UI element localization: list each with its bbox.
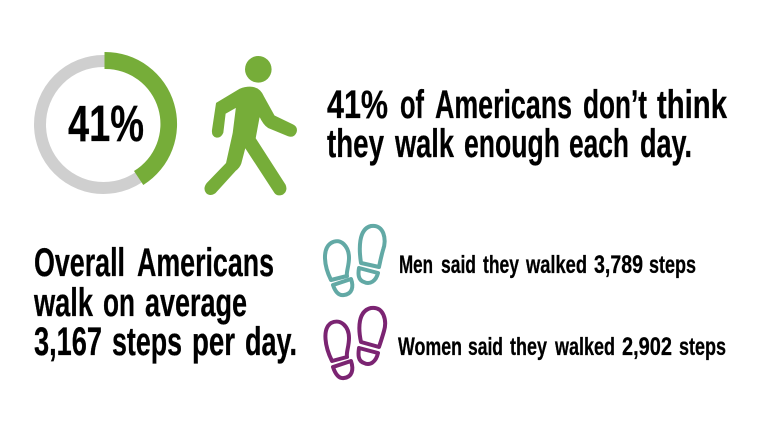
text: women steps: Women (398, 333, 462, 361)
heading: 41% of Americans (327, 83, 728, 166)
heading: 41% of Americans: they (327, 122, 385, 166)
text block: overall average steps: Overall (34, 241, 125, 285)
text block: overall average steps: walk (33, 281, 94, 325)
icon: purple footprints (325, 308, 385, 378)
heading: 41% of Americans: of (400, 83, 424, 127)
heading: 41% of Americans: day. (640, 122, 692, 166)
text block: overall average steps (33, 241, 297, 364)
text: women steps (398, 333, 726, 361)
heading: 41% of Americans: each (569, 122, 629, 166)
text: men steps: walked (525, 251, 587, 279)
text: men steps: they (483, 251, 519, 279)
heading: 41% of Americans: think (657, 83, 728, 127)
text: men steps: steps (649, 251, 696, 279)
text block: overall average steps: day. (245, 320, 297, 364)
text: women steps: said (468, 333, 503, 361)
heading: 41% of Americans: don’t (583, 83, 647, 127)
heading: 41% of Americans: walk (394, 122, 455, 166)
text block: overall average steps: Americans (137, 241, 274, 285)
donut value: 41% (68, 95, 144, 152)
text block: overall average steps: on (103, 281, 135, 325)
text: men steps: 3,789 (594, 251, 643, 279)
text block: overall average steps: per (192, 320, 235, 364)
heading: 41% of Americans: Americans (435, 83, 572, 127)
text: women steps: 2,902 (622, 333, 672, 361)
text: men steps (399, 251, 696, 279)
text block: overall average steps: 3,167 (34, 320, 102, 364)
text: women steps: walked (554, 333, 615, 361)
icon: teal footprints (325, 226, 385, 295)
heading: 41% of Americans: 41% (327, 83, 388, 127)
heading: 41% of Americans: enough (464, 122, 560, 166)
text: men steps: Men (399, 251, 433, 279)
donut chart: 41% (40, 52, 177, 188)
text: men steps: said (441, 251, 476, 279)
text: women steps: steps (679, 333, 726, 361)
text: women steps: they (510, 333, 547, 361)
icon: walking person (205, 56, 296, 195)
text block: overall average steps: average (145, 281, 247, 325)
text block: overall average steps: steps (112, 320, 182, 364)
